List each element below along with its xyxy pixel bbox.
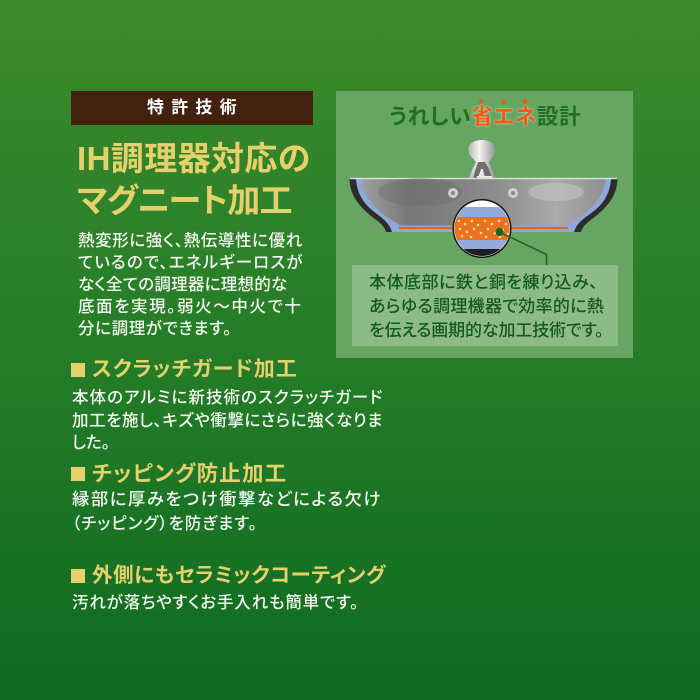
emphasis dots <box>478 99 528 104</box>
intro text: ているので、エネルギーロスが <box>78 254 304 272</box>
callout text: 本体底部に鉄と銅を練り込み、 <box>369 273 598 292</box>
frying pan cutaway diagram <box>350 140 618 265</box>
scratch guard marker <box>71 363 85 377</box>
main heading <box>77 140 311 219</box>
pan rivets <box>448 188 518 198</box>
callout text <box>369 273 604 340</box>
main heading: マグニート加工 <box>77 182 292 219</box>
main heading: IH調理器対応の <box>77 140 311 177</box>
scratch guard text <box>72 388 383 452</box>
scratch guard text: した。 <box>72 434 110 452</box>
intro text: 熱変形に強く、熱伝導性に優れ <box>78 232 303 250</box>
callout text: を伝える画期的な加工技術です。 <box>369 321 603 340</box>
section: scratch guard <box>71 358 383 452</box>
ceramic marker <box>71 569 85 583</box>
intro text: 底面を実現。弱火～中火で十 <box>78 298 303 316</box>
pan knob handle <box>468 140 496 178</box>
intro text: 分に調理ができます。 <box>78 320 232 338</box>
panel: energy saving design <box>336 91 633 358</box>
callout leader line <box>496 228 546 265</box>
chipping text: 縁部に厚みをつけ衝撃などによる欠け <box>72 489 382 509</box>
ceramic heading: 外側にもセラミックコーティング <box>92 564 386 587</box>
chipping heading: チッピング防止加工 <box>92 462 287 486</box>
pan body <box>350 178 618 232</box>
chipping marker <box>71 467 85 481</box>
chipping text <box>72 489 382 533</box>
intro text: なく全ての調理器に理想的な <box>78 276 287 294</box>
scratch guard heading: スクラッチガード加工 <box>92 358 298 381</box>
ceramic text: 汚れが落ちやすくお手入れも簡単です。 <box>72 594 359 612</box>
magnified cross-section <box>450 199 514 258</box>
intro text <box>78 232 304 338</box>
scratch guard text: 加工を施し、キズや衝撃にさらに強くなりま <box>72 412 383 430</box>
callout text box <box>352 265 618 346</box>
callout text: あらゆる調理機器で効率的に熱 <box>369 297 604 316</box>
panel title: うれしい省エネ設計 <box>389 105 581 129</box>
chipping text: （チッピング）を防ぎます。 <box>72 515 258 533</box>
banner label: 特許技術 <box>147 98 244 117</box>
section: exterior ceramic coating <box>71 564 386 612</box>
section: chipping prevention <box>71 462 382 533</box>
patent banner <box>71 91 313 125</box>
scratch guard text: 本体のアルミに新技術のスクラッチガード <box>72 389 383 407</box>
